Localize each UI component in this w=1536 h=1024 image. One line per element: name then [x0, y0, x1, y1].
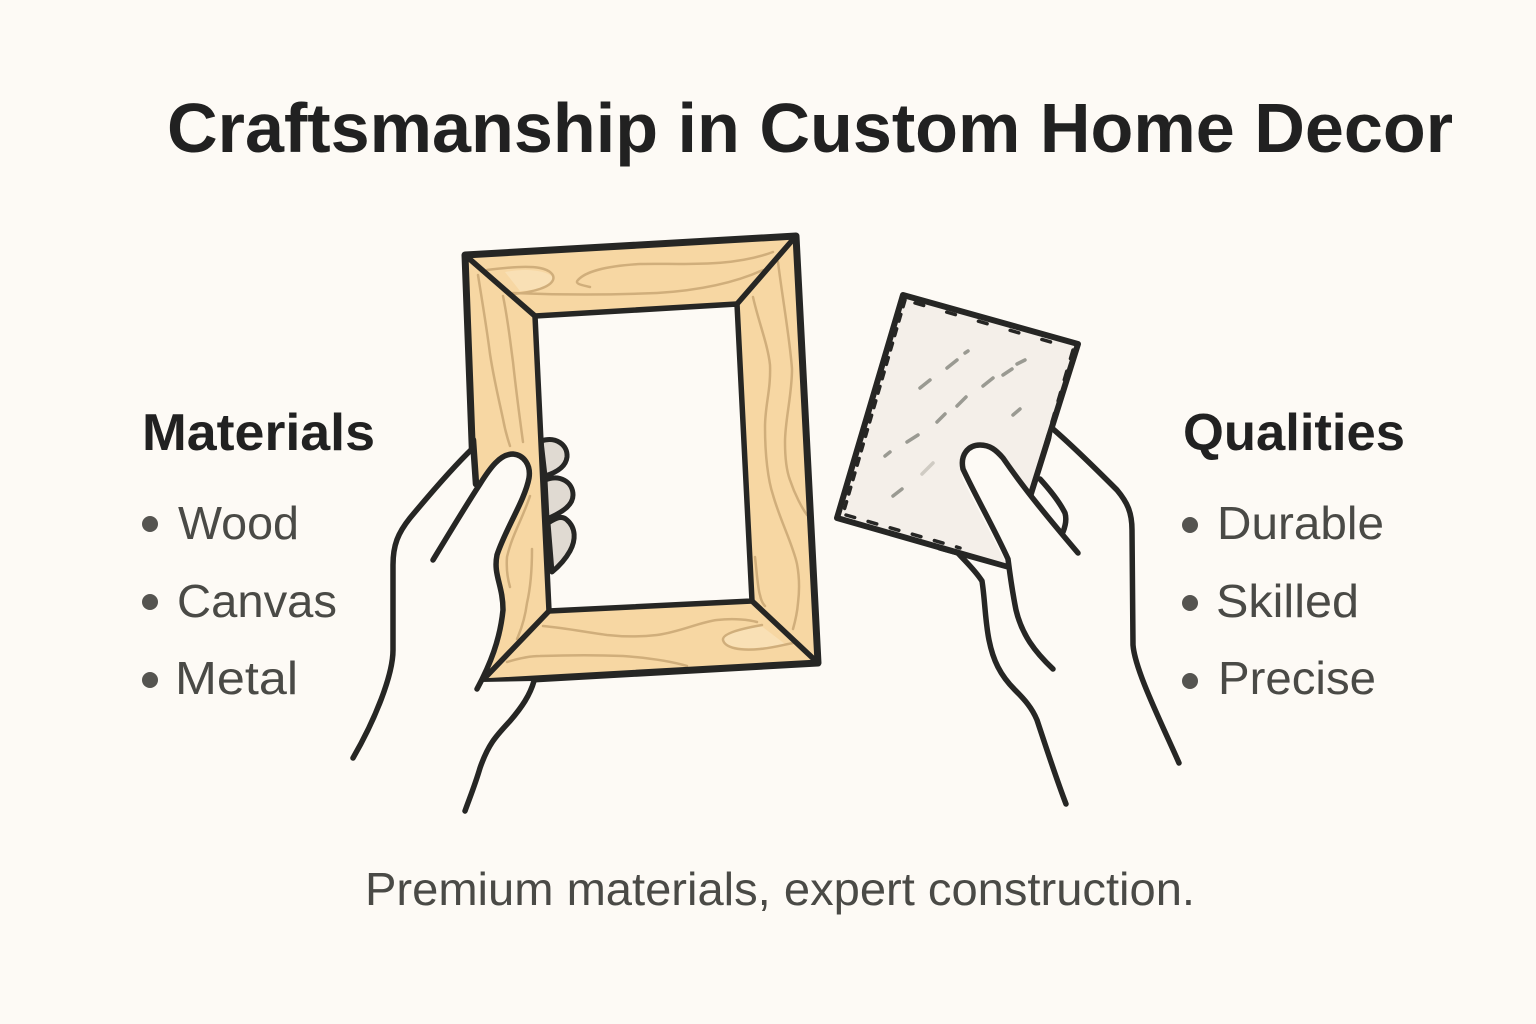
panel: qualities list: [1182, 404, 1405, 704]
list item: durable: Durable: [1217, 497, 1384, 549]
icon: right hand holding canvas: [940, 429, 1179, 804]
wood knots: [505, 270, 785, 648]
canvas stitched edge: [843, 300, 1073, 548]
list item: skilled: Skilled: [1216, 575, 1359, 627]
icon: canvas swatch: [837, 295, 1078, 567]
heading: qualities: Qualities: [1183, 404, 1405, 462]
panel: materials list: [142, 404, 375, 704]
icon: fingers behind frame: [541, 440, 574, 572]
list item: wood: Wood: [178, 497, 299, 549]
hand outline: [353, 440, 534, 811]
list item: precise: Precise: [1218, 652, 1376, 704]
icon: wooden picture frame: [465, 236, 818, 682]
icon: left hand holding frame: [353, 440, 534, 811]
frame outline: [465, 236, 818, 682]
heading: materials: Materials: [142, 404, 375, 462]
wood grain: [478, 252, 807, 666]
caption: Premium materials, expert construction.: [365, 863, 1195, 915]
hand outline: [940, 429, 1179, 804]
list item: metal: Metal: [175, 652, 298, 704]
title: Craftsmanship in Custom Home Decor: [167, 89, 1453, 167]
canvas outline: [837, 295, 1078, 567]
canvas weave marks: [885, 351, 1025, 496]
list item: canvas: Canvas: [177, 575, 337, 627]
